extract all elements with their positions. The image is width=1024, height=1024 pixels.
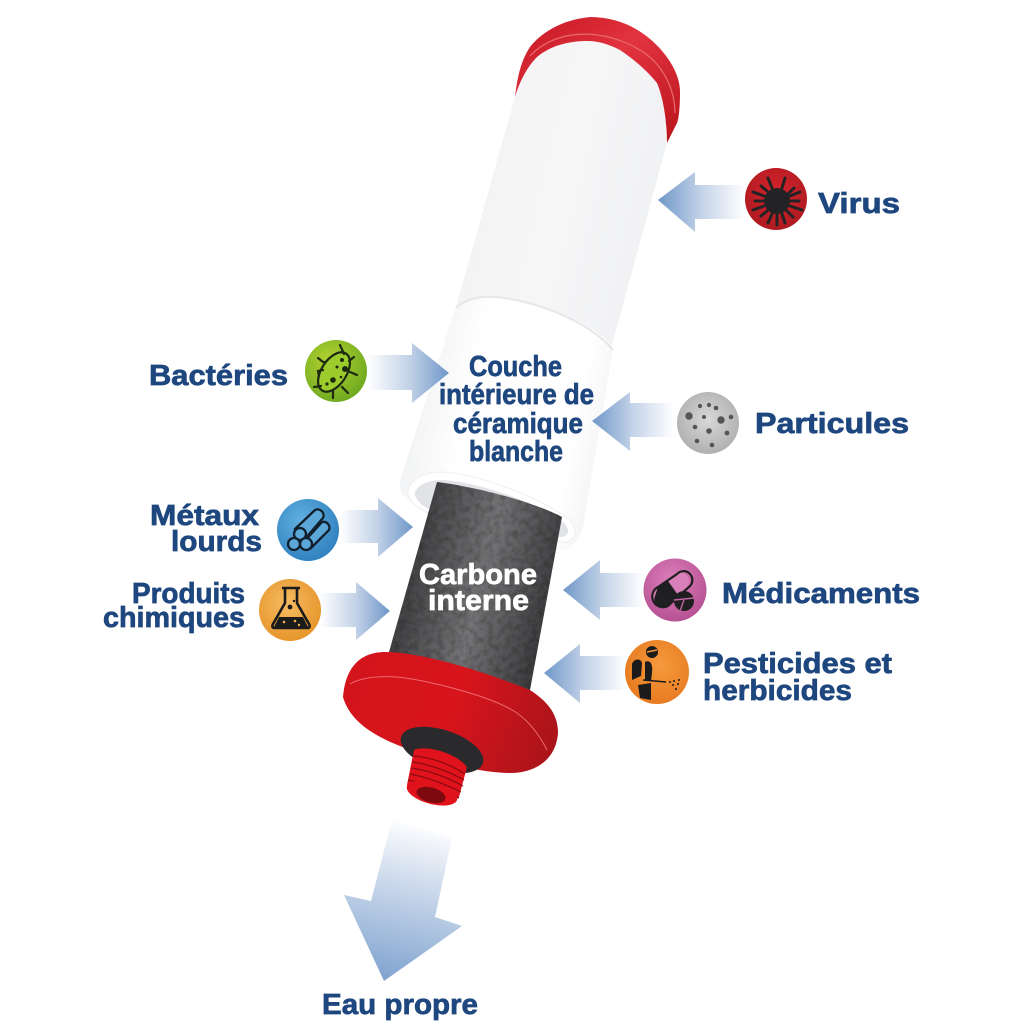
icon: virus <box>745 168 807 230</box>
label: Produits chimiques: chimiques <box>103 602 245 634</box>
top red cap <box>515 17 680 143</box>
label: ceramic layer <box>439 351 594 468</box>
label: Carbone interne <box>419 559 537 617</box>
label: Bactéries: Bactéries <box>149 360 288 392</box>
icon: particles <box>677 392 739 454</box>
label: Pesticides et herbicides: Pesticides et <box>703 648 893 680</box>
icon: heavy metals <box>277 499 339 561</box>
label: Eau propre: Eau propre <box>322 989 478 1021</box>
label: ceramic layer: Couche <box>469 351 562 383</box>
label: ceramic layer: blanche <box>469 436 563 468</box>
label: Carbone interne: Carbone <box>419 559 537 591</box>
icon: bacteria <box>305 340 367 402</box>
label: Pesticides et herbicides <box>703 648 893 707</box>
label: Produits chimiques: Produits <box>132 578 245 610</box>
black grommet <box>395 718 489 782</box>
label: Métaux lourds: lourds <box>171 526 262 558</box>
icon: pesticide sprayer <box>625 640 689 704</box>
threaded red outlet <box>404 748 467 810</box>
arrow: bacteria <box>368 343 449 403</box>
arrow: chemicals <box>320 582 390 640</box>
label: Métaux lourds: Métaux <box>150 500 259 532</box>
label: Carbone interne: interne <box>428 585 529 617</box>
inner carbon cylinder <box>389 482 562 690</box>
label: Produits chimiques <box>103 578 245 634</box>
inner white ceramic sleeve <box>400 297 613 550</box>
label: ceramic layer: céramique <box>453 408 583 440</box>
arrow: particles <box>592 392 674 451</box>
icon: medication <box>644 558 706 622</box>
label: Virus: Virus <box>818 188 900 220</box>
label: ceramic layer: intérieure de <box>439 379 594 411</box>
label: Pesticides et herbicides: herbicides <box>703 675 852 707</box>
arrow: heavy metals <box>340 498 413 557</box>
arrow: medication <box>563 560 644 620</box>
label: Médicaments: Médicaments <box>722 578 920 610</box>
arrow: clean water <box>344 820 462 981</box>
red base disk <box>343 652 558 773</box>
label: Particules: Particules <box>755 408 909 440</box>
arrow: pesticides <box>544 644 626 703</box>
outer white ceramic tube <box>445 41 667 345</box>
icon: chemical flask <box>259 579 321 641</box>
label: Métaux lourds <box>150 500 262 558</box>
filter cartridge <box>343 17 680 810</box>
arrow: virus <box>658 172 745 232</box>
